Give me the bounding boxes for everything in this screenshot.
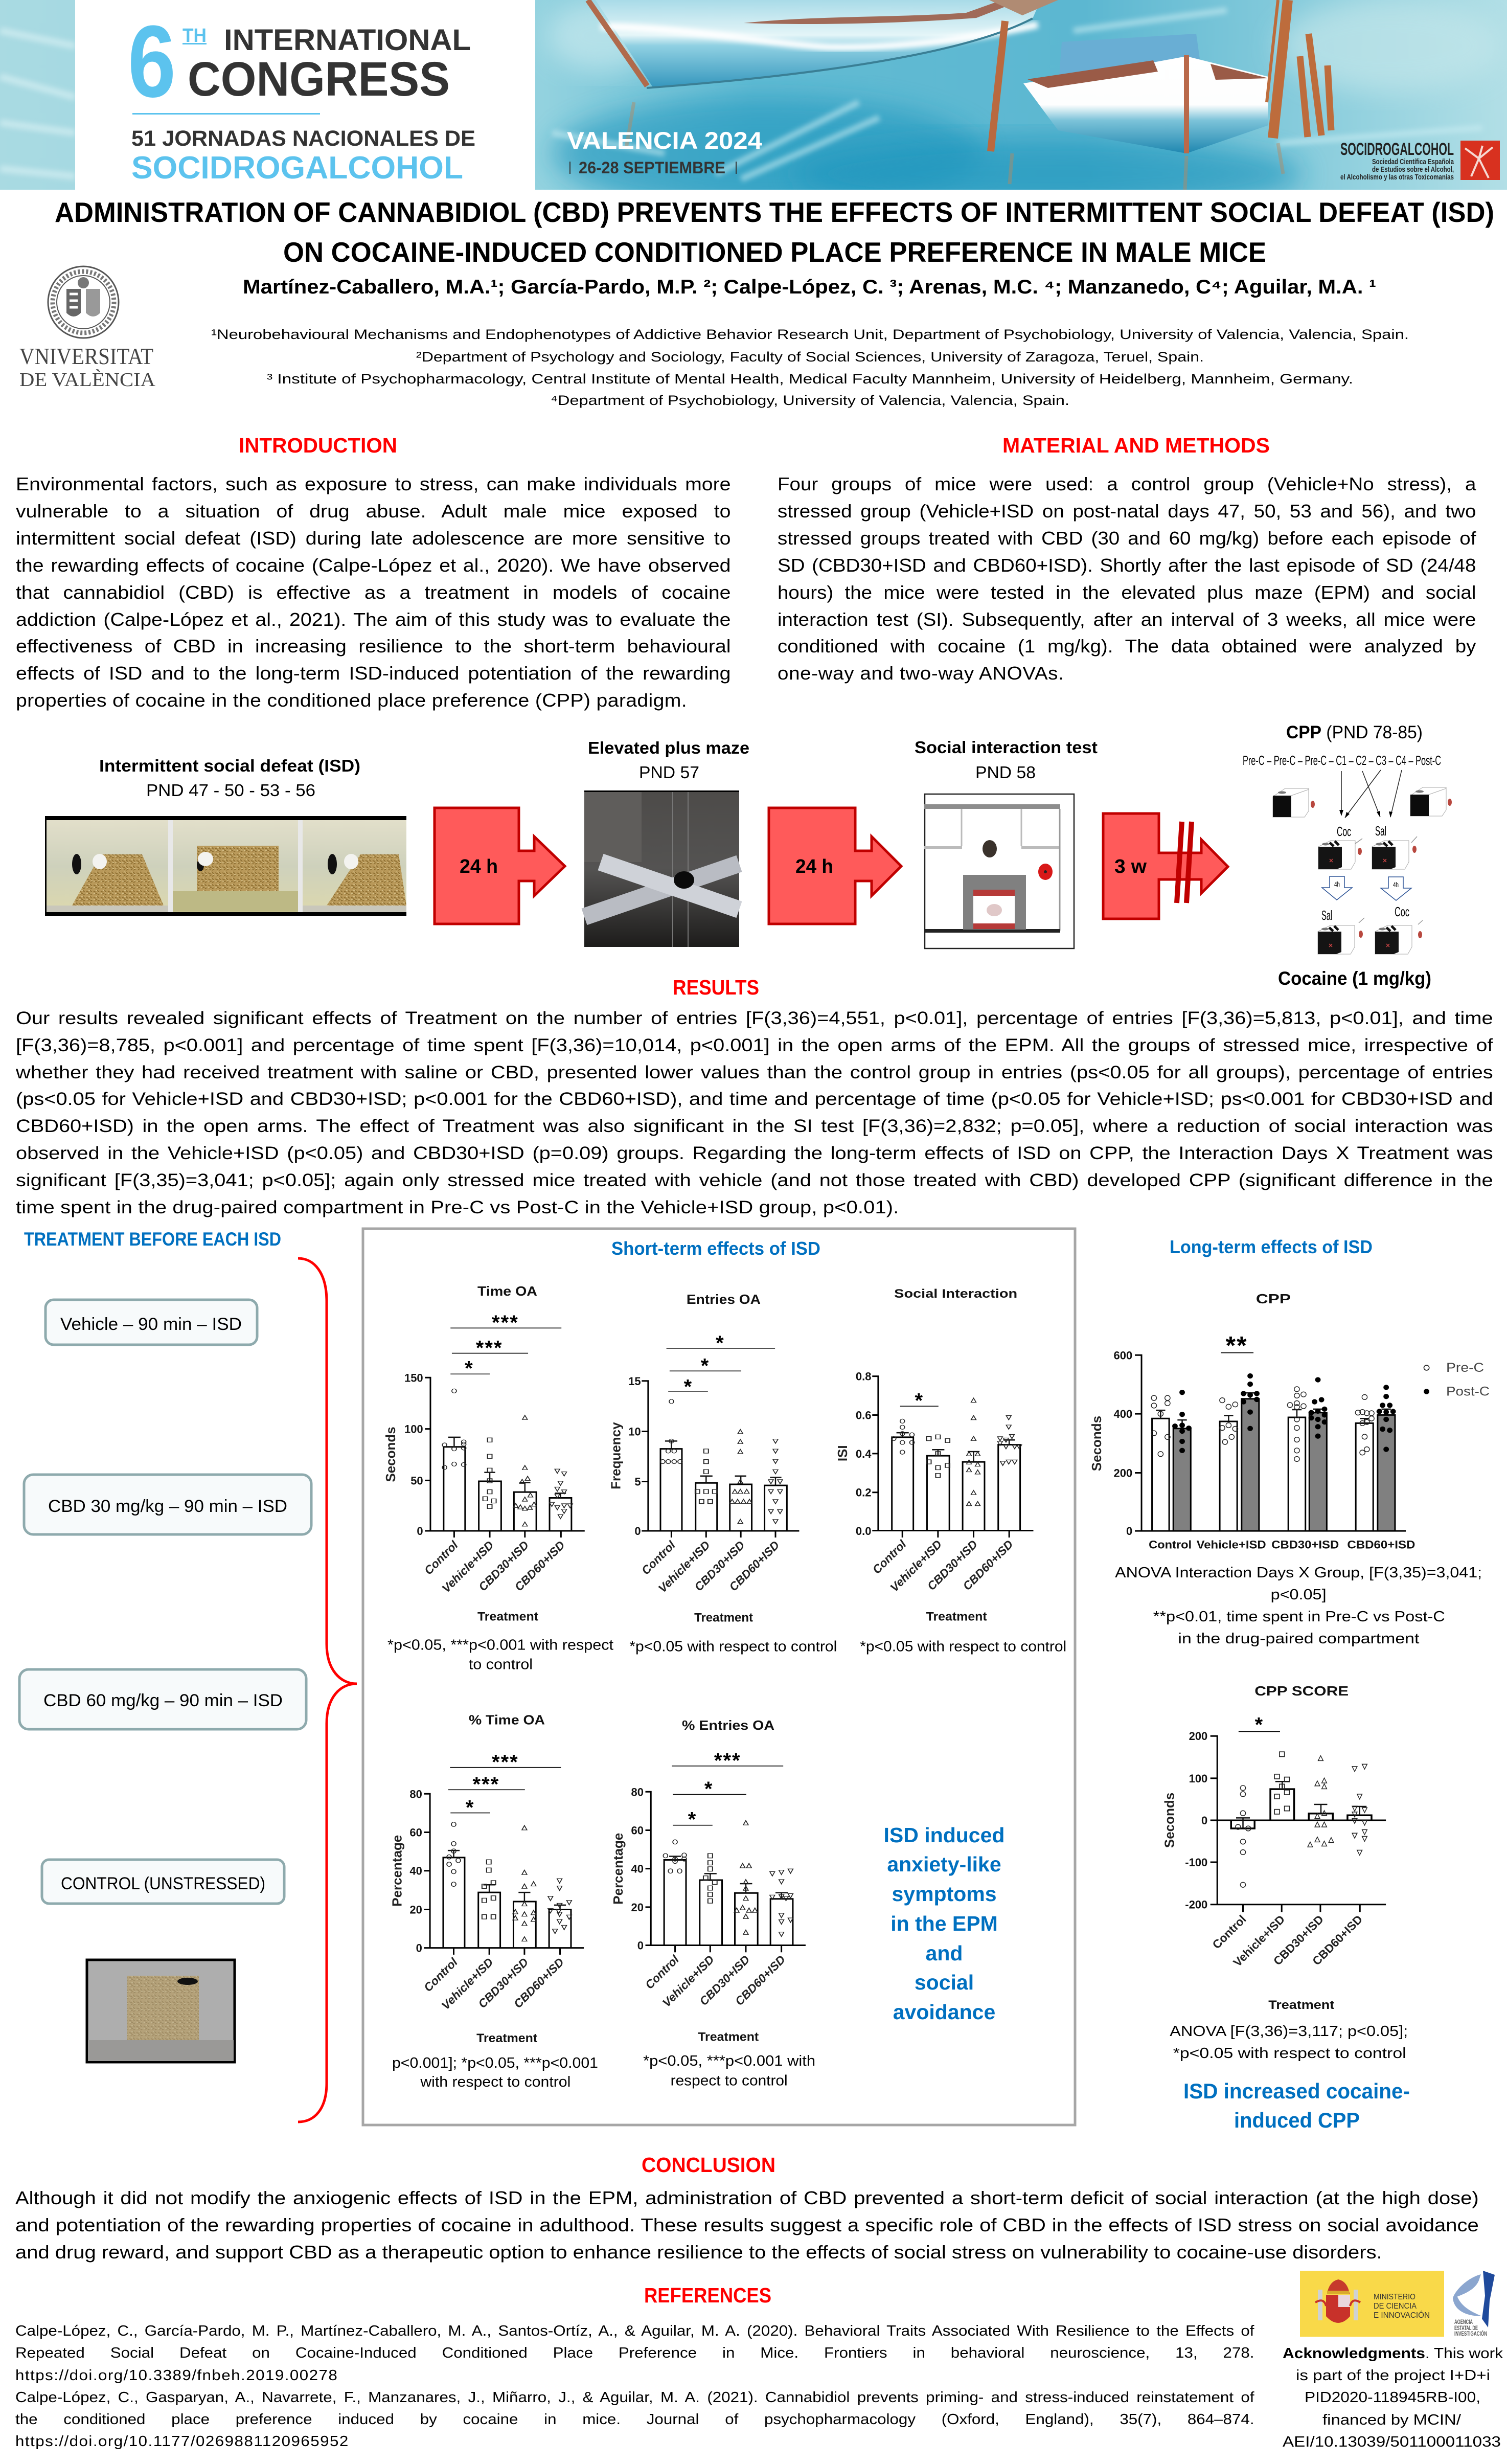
bar chart: percent Entries OA: Control xyxy=(643,1952,681,1992)
bar chart: percent Entries OA: *** xyxy=(714,1750,741,1772)
legend: Pre-C xyxy=(1446,1361,1484,1375)
arrows: 4 h delay: 4h xyxy=(1334,880,1340,888)
bar chart: percent Entries OA: * xyxy=(688,1808,697,1830)
bar chart: percent Time OA: 60 xyxy=(409,1826,422,1839)
panel: congress logo: 51 JORNADAS NACIONALES DE xyxy=(131,126,475,151)
bar chart: CPP score: -200 xyxy=(1185,1898,1207,1911)
bar chart: percent Time OA: * xyxy=(466,1797,474,1819)
photo: social defeat cages xyxy=(45,816,406,916)
photo: elevated plus maze xyxy=(584,790,739,947)
text: references: Calpe-López, C., Gasparyan, A., Navarrete, F., Manzanares, J., Miñarro, J., & Aguilar, M. A. (2021). Cannabidiol prevents priming- and stress-induced reinstatement of xyxy=(15,2389,1254,2406)
text: introduction: Environmental factors, such as exposure to stress, can make individuals more xyxy=(16,473,730,494)
bar chart: Social Interaction: 0.4 xyxy=(856,1448,872,1460)
text: material and methods: stressed groups treated with CBD (30 and 60 mg/kg) before each episode of xyxy=(778,528,1476,549)
bar chart: percent Entries OA: 80 xyxy=(631,1785,644,1798)
box: vehicle xyxy=(45,1300,257,1345)
logo: Socidrogalcohol society: de Estudios sobre el Alcohol, xyxy=(1372,165,1454,174)
text: introduction: the rewarding effects of cocaine (Calpe-López et al., 2020). We have observed xyxy=(16,555,730,576)
panel: congress logo: INTERNATIONAL xyxy=(224,24,471,57)
legend xyxy=(1427,1361,1490,1398)
text: material and methods: SD (CBD30+ISD and CBD60+ISD). Shortly after the last episode of SD (24/48 xyxy=(778,555,1476,576)
text: material and methods: Four groups of mice were used: a control group (Vehicle+No stress), a xyxy=(778,473,1476,494)
title: ON COCAINE-INDUCED CONDITIONED PLACE PREFERENCE IN MALE MICE xyxy=(283,236,1266,268)
bar chart: Entries OA: * xyxy=(684,1375,693,1398)
header banner xyxy=(0,0,1507,210)
photo: social interaction arena xyxy=(924,794,1074,948)
callout: ISD induced anxiety: avoidance xyxy=(893,2000,995,2024)
photo: control cage xyxy=(87,1960,235,2062)
bar chart: percent Entries OA: Percentage xyxy=(610,1833,626,1905)
panel: short-term effects of ISD: Short-term effects of ISD xyxy=(611,1238,820,1259)
text: conclusion: and potentiation of the rewarding properties of cocaine in adulthood. These results suggest a specific role of CBD in the effects of ISD stress on social avoidance xyxy=(15,2214,1479,2235)
bar chart: Entries OA xyxy=(608,1292,837,1655)
bar chart: Time OA: 0 xyxy=(417,1525,423,1538)
panel: congress logo: TH xyxy=(182,25,207,47)
panel: long-term effects of ISD xyxy=(1089,1236,1490,2132)
logo: Agencia Estatal de Investigación: AGENCIA xyxy=(1454,2318,1473,2325)
panel: congress logo: 6 xyxy=(128,5,176,119)
bar chart: CPP score: * xyxy=(1255,1714,1264,1736)
callout: ISD induced anxiety: and xyxy=(926,1941,963,1965)
bar chart: percent Time OA: with respect to control xyxy=(420,2074,570,2090)
bar chart: CPP: ANOVA Interaction Days X Group, [F(3,35)=3,041; xyxy=(1115,1565,1482,1581)
text: results: Our results revealed significant effects of Treatment on the number of entries [F(3,36)=4,551, p<0.01], percentage of entries [F(3,36)=5,813, p<0.01], and time xyxy=(16,1008,1493,1028)
bar chart: Time OA: 100 xyxy=(404,1423,423,1436)
bar chart: Entries OA: CBD60+ISD xyxy=(726,1538,782,1594)
protocol: conditioned place preference: Cocaine (1 mg/kg) xyxy=(1278,968,1431,989)
bar chart: CPP score: 200 xyxy=(1189,1730,1207,1743)
bar chart: CPP score: Vehicle+ISD xyxy=(1230,1912,1287,1969)
bar chart: Time OA: CBD60+ISD xyxy=(512,1538,567,1594)
bar chart: Entries OA: * xyxy=(701,1354,710,1377)
logo: Socidrogalcohol society xyxy=(1340,140,1500,182)
logo: University of Valencia: VNIVERSITAT xyxy=(19,343,153,369)
text: material and methods: stressed group (Vehicle+ISD on post-natal days 47, 50, 53 and 56), and two xyxy=(778,501,1476,522)
protocol: conditioned place preference: CPP (PND 78-85) xyxy=(1286,722,1423,742)
acknowledgments: AEI/10.13039/501100011033 xyxy=(1283,2434,1501,2450)
protocol: elevated plus maze: PND 57 xyxy=(639,763,699,782)
protocol: intermittent social defeat: Intermittent social defeat (ISD) xyxy=(99,756,360,775)
bar chart: Social Interaction: *p<0.05 with respect to control xyxy=(860,1638,1066,1655)
bar chart: CPP score: 0 xyxy=(1201,1814,1207,1827)
bar chart: Entries OA: Vehicle+ISD xyxy=(655,1538,713,1595)
bar chart: percent Time OA: Vehicle+ISD xyxy=(439,1955,496,2012)
text: introduction: effectiveness of CBD in increasing resilience to the short-term behavioural xyxy=(16,636,730,657)
bar chart: percent Entries OA: 0 xyxy=(637,1939,644,1952)
bar chart: CPP score: CPP SCORE xyxy=(1254,1683,1349,1699)
bar chart: CPP: Seconds xyxy=(1089,1416,1104,1471)
arrows: 4 h delay: 4h xyxy=(1393,880,1399,889)
text: references: https://doi.org/10.3389/fnbeh.2019.00278 xyxy=(15,2367,338,2384)
bar chart: percent Entries OA: 40 xyxy=(631,1863,644,1875)
heading: references: REFERENCES xyxy=(644,2284,771,2307)
bar chart: CPP: ** xyxy=(1226,1331,1248,1360)
text: references: the conditioned place preference induced by cocaine in mice. Journal of psychopharmacology (Oxford, England), 35(7), 864–874. xyxy=(15,2411,1254,2428)
text: results: time spent in the drug-paired compartment in Pre-C vs Post-C in the Vehicle+ISD group, p<0.01). xyxy=(16,1197,899,1217)
text: material and methods: one-way and two-way ANOVAs. xyxy=(778,663,1064,684)
bar chart: percent Entries OA: *p<0.05, ***p<0.001 with xyxy=(643,2053,815,2069)
title xyxy=(55,196,1494,268)
bar chart: Time OA: 50 xyxy=(410,1474,423,1487)
arrow: 24 h xyxy=(435,808,565,924)
bar chart: Entries OA: 5 xyxy=(634,1476,641,1488)
box: CBD 60: CBD 60 mg/kg – 90 min – ISD xyxy=(43,1691,283,1710)
callout: ISD increased CPP: ISD increased cocaine- xyxy=(1183,2079,1410,2103)
bar chart: CPP score: ANOVA [F(3,36)=3,117; p<0.05]; xyxy=(1170,2023,1408,2040)
acknowledgments: financed by MCIN/ xyxy=(1322,2412,1462,2428)
bar chart: Entries OA: 0 xyxy=(634,1525,641,1538)
bar chart: Entries OA: Treatment xyxy=(694,1611,753,1624)
logo: Ministerio de Ciencia e Innovación: E INNOVACIÓN xyxy=(1374,2310,1430,2320)
bar chart: CPP: Vehicle+ISD xyxy=(1197,1539,1266,1551)
text: material and methods: conditioned with cocaine (1 mg/kg). The data obtained were analyzed by xyxy=(778,636,1476,657)
arrows: session sequence xyxy=(1339,770,1402,818)
text: results: [F(3,36)=8,785, p<0.001] and percentage of time spent [F(3,36)=10,014, p<0.001] in the open arms of the EPM. All the groups of stressed mice, irrespective of xyxy=(16,1035,1493,1055)
bar chart: Entries OA: CBD30+ISD xyxy=(692,1538,747,1594)
text: introduction: addiction (Calpe-López et al., 2021). The aim of this study was to evaluate the xyxy=(16,609,730,630)
bar chart: CPP: CPP xyxy=(1256,1291,1291,1306)
arrows: 4 h delay xyxy=(1322,876,1411,900)
panel: long-term effects of ISD: Long-term effects of ISD xyxy=(1170,1236,1373,1257)
bar chart: percent Time OA: Control xyxy=(421,1955,460,1994)
bar chart: Entries OA: 10 xyxy=(628,1425,641,1438)
bar chart: Time OA: Seconds xyxy=(383,1427,398,1482)
protocol: conditioned place preference: Coc xyxy=(1337,824,1351,839)
bar chart: percent Time OA: CBD60+ISD xyxy=(511,1955,566,2010)
panel: treatment before each ISD: TREATMENT BEFORE EACH ISD xyxy=(24,1229,281,1250)
logo: Agencia Estatal de Investigación: INVESTIGACIÓN xyxy=(1454,2330,1487,2337)
painting: boats on the sea xyxy=(0,0,1507,210)
callout: ISD increased CPP xyxy=(1183,2079,1410,2132)
bar chart: Time OA: * xyxy=(465,1358,474,1380)
panel: treatment before each ISD xyxy=(19,1229,357,2122)
brace xyxy=(298,1258,357,2122)
arrow: 24 h xyxy=(769,808,901,924)
text: conclusion xyxy=(15,2187,1479,2263)
bar chart: CPP: 400 xyxy=(1114,1408,1132,1420)
bar chart: percent Entries OA: Treatment xyxy=(698,2030,759,2044)
bar chart: Social Interaction: * xyxy=(915,1390,924,1412)
heading: conclusion: CONCLUSION xyxy=(642,2153,775,2177)
box: CBD 30: CBD 30 mg/kg – 90 min – ISD xyxy=(48,1497,287,1516)
bar chart: Time OA: CBD30+ISD xyxy=(476,1538,531,1594)
bar chart: percent Entries OA: 20 xyxy=(631,1901,644,1914)
bar chart: CPP: Control xyxy=(1149,1539,1192,1551)
bar chart: Social Interaction: CBD30+ISD xyxy=(925,1538,980,1593)
callout: ISD induced anxiety: social xyxy=(915,1971,974,1994)
bar chart: percent Time OA: CBD30+ISD xyxy=(475,1955,531,2010)
bar chart: percent Time OA: 20 xyxy=(409,1903,422,1916)
bar chart: CPP: **p<0.01, time spent in Pre-C vs Post-C xyxy=(1153,1609,1445,1625)
bar chart: Entries OA: Control xyxy=(639,1538,678,1577)
bar chart: CPP score: 100 xyxy=(1189,1772,1207,1785)
bar chart: CPP score: Treatment xyxy=(1268,1998,1334,2012)
protocol: social interaction test: Social interaction test xyxy=(915,738,1098,757)
protocol: conditioned place preference: Coc xyxy=(1395,904,1409,919)
bar chart: CPP score: Seconds xyxy=(1161,1793,1177,1848)
bar chart: CPP: 600 xyxy=(1114,1349,1132,1362)
bar chart: Social Interaction: 0.6 xyxy=(856,1409,872,1421)
protocol: social interaction test xyxy=(915,738,1098,948)
logo: Ministerio de Ciencia e Innovación: MINISTERIO xyxy=(1374,2293,1415,2301)
box: control xyxy=(42,1860,284,1904)
bar chart: CPP xyxy=(1089,1291,1490,1647)
bar chart: CPP: in the drug-paired compartment xyxy=(1178,1631,1419,1647)
box: CBD 60 xyxy=(19,1669,306,1729)
text: results: significant [F(3,35)=3,041; p<0.05]; again only stressed mice treated with vehicle (and not those treated with CBD) developed CPP (significant difference in the xyxy=(16,1170,1493,1190)
box: control: CONTROL (UNSTRESSED) xyxy=(61,1874,265,1893)
bar chart: CPP: CBD30+ISD xyxy=(1271,1539,1339,1551)
arrow: 3 w interrupted: 3 w xyxy=(1114,856,1147,877)
affiliations: ²Department of Psychology and Sociology, Faculty of Social Sciences, University of Zaragoza, Teruel, Spain. xyxy=(416,349,1204,365)
text: results: (ps<0.05 for Vehicle+ISD and CBD30+ISD; p<0.001 for the CBD60+ISD), and time and percentage of time (p<0.05 for Vehicle+ISD; ps<0.001 for CBD30+ISD and xyxy=(16,1089,1493,1109)
bar chart: Entries OA: *p<0.05 with respect to control xyxy=(629,1638,837,1655)
panel: congress logo xyxy=(75,0,535,190)
callout: ISD induced anxiety xyxy=(884,1823,1004,2024)
logo: University of Valencia xyxy=(19,266,156,391)
bar chart: CPP score: *p<0.05 with respect to control xyxy=(1173,2045,1406,2062)
text: results: observed in the Vehicle+ISD (p<0.05) and CBD30+ISD (p=0.09) groups. Regarding the long-term effects of ISD on CPP, the Interaction Days X Treatment was xyxy=(16,1143,1493,1163)
box: CBD 30 xyxy=(24,1475,311,1534)
text: references: https://doi.org/10.1177/0269881120965952 xyxy=(15,2433,349,2450)
bar chart: Time OA: Treatment xyxy=(477,1610,538,1624)
text: introduction: effects of ISD and to the long-term ISD-induced potentiation of the rewarding xyxy=(16,663,730,684)
bar chart: CPP score xyxy=(1161,1683,1408,2062)
heading: results: RESULTS xyxy=(673,976,759,999)
logo: Socidrogalcohol society: el Alcoholismo y las otras Toxicomanías xyxy=(1340,173,1454,182)
bar chart: percent Entries OA xyxy=(610,1717,815,2089)
bar chart: percent Time OA: Percentage xyxy=(390,1835,405,1907)
bar chart: percent Time OA: % Time OA xyxy=(469,1712,545,1727)
bar chart: Time OA: 150 xyxy=(404,1371,423,1384)
bar chart: Social Interaction: Social Interaction xyxy=(894,1287,1017,1301)
bar chart: percent Time OA: *** xyxy=(473,1773,499,1796)
bar chart: Entries OA: Entries OA xyxy=(687,1292,761,1307)
protocol: intermittent social defeat: PND 47 - 50 - 53 - 56 xyxy=(146,781,315,800)
arrow: 24 h: 24 h xyxy=(795,856,833,877)
panel: congress logo: SOCIDROGALCOHOL xyxy=(131,150,463,186)
bar chart: Social Interaction: 0.2 xyxy=(856,1486,872,1499)
bar chart: Social Interaction: CBD60+ISD xyxy=(960,1538,1016,1593)
protocol: conditioned place preference: Sal xyxy=(1321,908,1332,923)
bar chart: CPP score: -100 xyxy=(1185,1856,1207,1869)
text: introduction xyxy=(16,473,730,711)
text: Valencia 2024 dates xyxy=(567,127,762,177)
bar chart: percent Entries OA: % Entries OA xyxy=(682,1717,774,1733)
logo: Agencia Estatal de Investigación: ESTATAL DE xyxy=(1454,2324,1478,2332)
callout: ISD increased CPP: induced CPP xyxy=(1234,2108,1360,2132)
protocol: conditioned place preference: Sal xyxy=(1375,823,1386,839)
text: conclusion: Although it did not modify the anxiogenic effects of ISD in the EPM, administration of CBD prevented a short-term deficit of social interaction (at the high dose) xyxy=(15,2187,1479,2208)
bar chart: CPP: 200 xyxy=(1114,1466,1132,1479)
bar chart: Time OA: *** xyxy=(476,1337,503,1360)
bar chart: Time OA: Vehicle+ISD xyxy=(439,1538,496,1595)
acknowledgments: is part of the project I+D+i xyxy=(1296,2367,1490,2384)
bar chart: percent Time OA xyxy=(390,1712,598,2090)
legend: Post-C xyxy=(1446,1384,1490,1398)
bar chart: percent Time OA: *** xyxy=(492,1751,519,1774)
callout: ISD induced anxiety: anxiety-like xyxy=(887,1852,1001,1876)
bar chart: Time OA: to control xyxy=(469,1656,533,1672)
protocol: elevated plus maze: Elevated plus maze xyxy=(588,738,749,757)
bar chart: Time OA: Time OA xyxy=(477,1283,537,1299)
bar chart: percent Entries OA: CBD60+ISD xyxy=(733,1953,788,2008)
text: conclusion: and drug reward, and support CBD as a therapeutic option to enhance resilience to the effects of social stress on vulnerability to cocaine-use disorders. xyxy=(15,2242,1382,2263)
bar chart: Social Interaction xyxy=(835,1287,1066,1655)
bar chart: Entries OA: * xyxy=(716,1332,725,1354)
protocol: social interaction test: PND 58 xyxy=(975,763,1036,782)
text: material and methods: interaction test (SI). Subsequently, after an interval of 3 weeks, all mice were xyxy=(778,609,1476,630)
bar chart: Social Interaction: 0.0 xyxy=(856,1525,872,1538)
bar chart: Time OA: *p<0.05, ***p<0.001 with respect xyxy=(387,1637,613,1654)
text: Valencia 2024 dates: VALENCIA 2024 xyxy=(567,127,762,154)
affiliations: ³ Institute of Psychopharmacology, Central Institute of Mental Health, Medical Faculty Mannheim, University of Heidelberg, Mannheim, Germany. xyxy=(267,371,1353,387)
text: material and methods: hours) the mice were tested in the elevated plus maze (EPM) and social xyxy=(778,582,1476,603)
bar chart: Social Interaction: Treatment xyxy=(926,1610,987,1624)
logo: Agencia Estatal de Investigación xyxy=(1453,2271,1495,2337)
bar chart: Social Interaction: Control xyxy=(870,1537,909,1576)
icon: CPP boxes xyxy=(1273,787,1452,954)
bar chart: Social Interaction: Vehicle+ISD xyxy=(887,1538,944,1594)
logo: Socidrogalcohol society: Sociedad Científica Española xyxy=(1372,157,1454,166)
affiliations: ¹Neurobehavioural Mechanisms and Endophenotypes of Addictive Behavior Research Unit, Department of Psychobiology, University of Valencia, Valencia, Spain. xyxy=(211,327,1409,342)
bar chart: percent Time OA: Treatment xyxy=(476,2031,537,2045)
bar chart: percent Time OA: 0 xyxy=(416,1942,422,1955)
logo: University of Valencia: DE VALÈNCIA xyxy=(19,369,156,391)
bar chart: CPP: p<0.05] xyxy=(1271,1587,1327,1603)
bar chart: CPP: CBD60+ISD xyxy=(1347,1539,1415,1551)
text: introduction: that cannabidiol (CBD) is effective as a treatment in models of cocaine xyxy=(16,582,730,603)
text: Valencia 2024 dates: 26-28 SEPTIEMBRE xyxy=(579,159,725,177)
heading: material and methods: MATERIAL AND METHODS xyxy=(1002,434,1270,457)
text: introduction: intermittent social defeat (ISD) during late adolescence are more sensitive to xyxy=(16,528,730,549)
panel: short-term effects of ISD xyxy=(363,1229,1075,2125)
acknowledgments xyxy=(1283,2345,1503,2450)
acknowledgments: PID2020-118945RB-I00, xyxy=(1305,2389,1480,2406)
bar chart: percent Entries OA: respect to control xyxy=(671,2072,788,2089)
box: vehicle: Vehicle – 90 min – ISD xyxy=(60,1315,242,1334)
affiliations: ⁴Department of Psychobiology, University of Valencia, Valencia, Spain. xyxy=(551,393,1069,408)
bar chart: Entries OA: Frequency xyxy=(608,1422,623,1489)
logo: Ministerio de Ciencia e Innovación xyxy=(1300,2271,1444,2337)
arrow: 24 h: 24 h xyxy=(460,856,498,877)
text: references: Calpe-López, C., García-Pardo, M. P., Martínez-Caballero, M. A., Santos-Ortíz, A., & Aguilar, M. A. (2020). Behavioral Traits Associated With Resilience to the Effects of xyxy=(15,2323,1254,2339)
bar chart: Social Interaction: ISI xyxy=(835,1445,850,1461)
bar chart: Time OA: *** xyxy=(492,1312,519,1334)
bar chart: percent Entries OA: CBD30+ISD xyxy=(697,1953,752,2008)
affiliations xyxy=(211,327,1409,408)
protocol: intermittent social defeat xyxy=(45,756,406,916)
authors: Martínez-Caballero, M.A.¹; García-Pardo, M.P. ²; Calpe-López, C. ³; Arenas, M.C. ⁴; Manzanedo, C⁴; Aguilar, M.A. ¹ xyxy=(243,276,1376,298)
bar chart: CPP score: CBD30+ISD xyxy=(1271,1912,1326,1968)
callout: ISD induced anxiety: symptoms xyxy=(892,1882,997,1906)
bar chart: Social Interaction: 0.8 xyxy=(856,1370,872,1383)
bar chart: Entries OA: 15 xyxy=(628,1375,641,1388)
bar chart: percent Entries OA: Vehicle+ISD xyxy=(659,1953,717,2009)
bar chart: percent Time OA: 80 xyxy=(409,1788,422,1800)
heading: introduction: INTRODUCTION xyxy=(239,434,397,457)
bar chart: CPP: 0 xyxy=(1126,1525,1132,1538)
logo: Ministerio de Ciencia e Innovación: DE CIENCIA xyxy=(1374,2302,1417,2311)
text: results: CBD60+ISD) in the open arms. The effect of Treatment was also significant in the SI test [F(3,36)=2,832; p=0.05], where a reduction of social interaction was xyxy=(16,1116,1493,1136)
text: references: Repeated Social Defeat on Cocaine-Induced Conditioned Place Preference in Mice. Frontiers in behavioral neuroscience, 13, 278. xyxy=(15,2345,1254,2361)
bar chart: CPP score: CBD60+ISD xyxy=(1310,1912,1365,1968)
callout: ISD induced anxiety: ISD induced xyxy=(884,1823,1004,1847)
bar chart: Time OA: Control xyxy=(422,1538,461,1577)
callout: ISD induced anxiety: in the EPM xyxy=(890,1912,998,1935)
panel: congress logo: CONGRESS xyxy=(188,52,450,106)
text: introduction: vulnerable to a situation of drug abuse. Adult male mice exposed to xyxy=(16,501,730,522)
bar chart: percent Entries OA: * xyxy=(704,1778,713,1800)
text: results: whether they had received treatment with saline or CBD, presented lower values than the control group in entries (ps<0.05 for all groups), percentage of entries xyxy=(16,1062,1493,1082)
arrow: 3 w interrupted xyxy=(1103,813,1228,919)
bar chart: CPP score: Control xyxy=(1209,1912,1249,1951)
bar chart: percent Time OA: p<0.001]; *p<0.05, ***p<0.001 xyxy=(392,2055,598,2071)
protocol: conditioned place preference xyxy=(1243,722,1452,989)
bar chart: percent Entries OA: 60 xyxy=(631,1824,644,1837)
text: material and methods xyxy=(778,473,1476,684)
bar chart: Time OA xyxy=(383,1283,613,1672)
text: references xyxy=(15,2323,1254,2450)
bar chart: percent Time OA: 40 xyxy=(409,1865,422,1878)
text: introduction: properties of cocaine in the conditioned place preference (CPP) paradigm. xyxy=(16,690,687,711)
protocol: elevated plus maze xyxy=(584,738,749,947)
text: results xyxy=(16,1008,1493,1217)
acknowledgments: Acknowledgments . This work xyxy=(1283,2345,1503,2362)
